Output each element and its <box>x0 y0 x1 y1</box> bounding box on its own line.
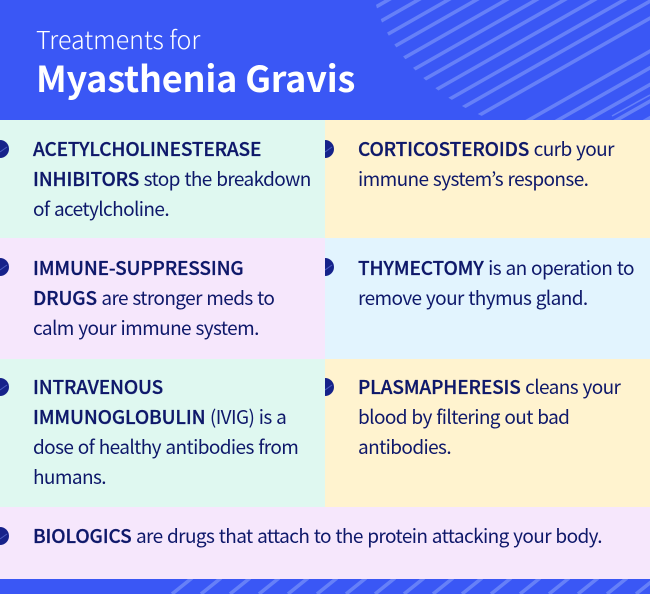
text: ACETYLCHOLINESTERASE <box>33 135 261 162</box>
title <box>36 21 355 103</box>
text <box>33 373 298 490</box>
text: of acetylcholine. <box>33 195 169 222</box>
text: calm your immune system. <box>33 314 259 341</box>
bullet icon <box>0 378 9 396</box>
text: antibodies. <box>358 433 451 460</box>
footer banner <box>0 579 650 594</box>
bullet icon <box>0 527 9 545</box>
panel: immune-suppressing drugs <box>0 238 325 359</box>
text <box>33 254 274 341</box>
text <box>32 135 311 222</box>
bullet icon <box>0 258 9 276</box>
header stripe pattern <box>376 0 650 120</box>
text: THYMECTOMY is an operation to <box>358 254 634 281</box>
text: INHIBITORS stop the breakdown <box>33 165 311 192</box>
text: INTRAVENOUS <box>33 373 163 400</box>
text: dose of healthy antibodies from <box>33 433 298 460</box>
title line 2: Myasthenia Gravis <box>36 51 355 103</box>
panel: biologics <box>0 507 650 579</box>
panel: thymectomy <box>325 238 650 359</box>
text: remove your thymus gland. <box>358 284 588 311</box>
header banner <box>0 0 650 120</box>
panel: plasmapheresis <box>325 359 650 507</box>
text: PLASMAPHERESIS cleans your <box>358 373 620 400</box>
bullet icon <box>0 140 9 158</box>
title line 1: Treatments for <box>36 21 200 57</box>
text: DRUGS are stronger meds to <box>33 284 274 311</box>
text: blood by filtering out bad <box>358 403 569 430</box>
bullet icon <box>325 378 334 396</box>
bullet icon <box>325 140 334 158</box>
panel: corticosteroids <box>325 120 650 238</box>
text <box>358 254 634 311</box>
text <box>358 373 621 460</box>
panel: acetylcholinesterase inhibitors <box>0 120 325 238</box>
text: humans. <box>33 463 106 490</box>
bullet icon <box>325 258 334 276</box>
text: CORTICOSTEROIDS curb your <box>358 135 614 162</box>
text: immune system’s response. <box>358 165 588 192</box>
text: BIOLOGICS are drugs that attach to the protein attacking your body. <box>33 522 602 549</box>
text <box>358 135 614 192</box>
panel: intravenous immunoglobulin <box>0 359 325 507</box>
text: IMMUNOGLOBULIN (IVIG) is a <box>33 403 286 430</box>
text: IMMUNE-SUPPRESSING <box>33 254 244 281</box>
